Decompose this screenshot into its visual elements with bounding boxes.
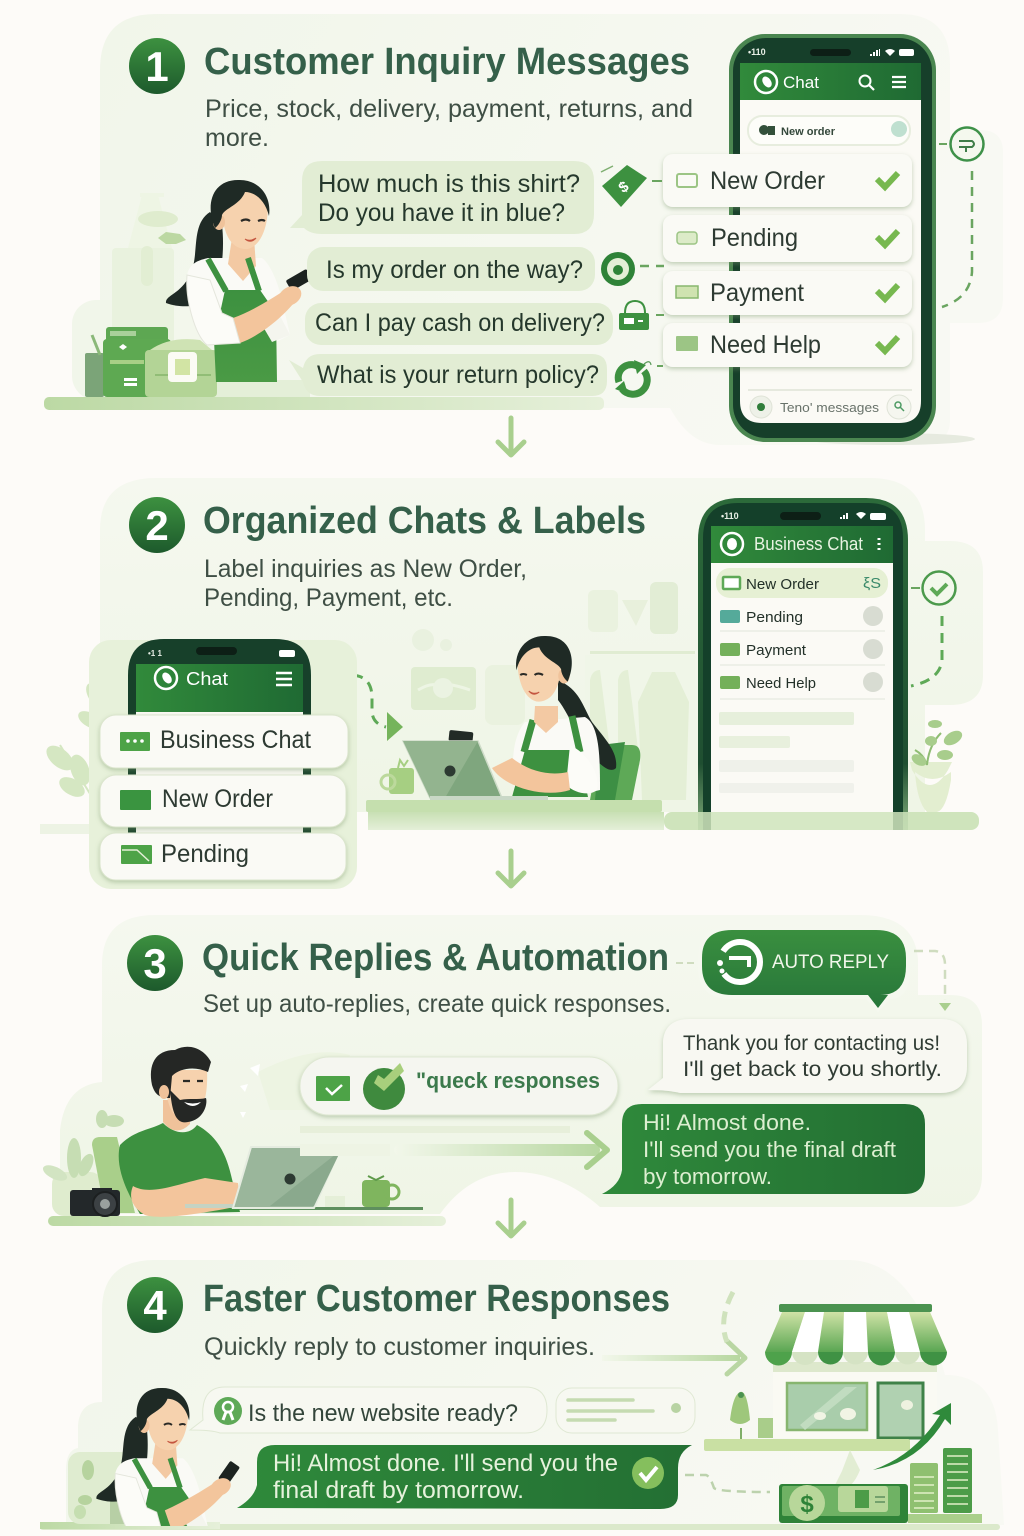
illustration: cash, bars and growth arrow bbox=[685, 1403, 982, 1523]
group: small phone with label cards: •1 1 bbox=[148, 649, 162, 658]
arrow: step 2 to 3 bbox=[498, 851, 524, 886]
label card: new order bbox=[663, 154, 912, 207]
text block: step 2 description: Pending, Payment, etc. bbox=[204, 584, 453, 612]
icon: return arrows bbox=[615, 360, 663, 394]
phone: chat app bbox=[729, 34, 975, 445]
badge: number 3: 3 bbox=[143, 940, 167, 987]
phone: chat app: •110 bbox=[748, 47, 766, 57]
chat bubble: website question bbox=[190, 1387, 547, 1433]
chat bubble: thank you bbox=[648, 1019, 967, 1093]
illustration: mug bbox=[381, 760, 414, 794]
chat bubble: order status question: Is my order on the way? bbox=[326, 256, 583, 284]
icon: check badge with dashed connector bbox=[911, 572, 956, 686]
label card: need help bbox=[663, 323, 912, 367]
text block: step 4 description: Quickly reply to customer inquiries. bbox=[204, 1333, 595, 1361]
chat bubble: website question: Is the new website ready? bbox=[248, 1400, 518, 1427]
arrow: dashed auto reply to message bbox=[914, 951, 951, 1011]
panel: step 1 customer inquiry messages bbox=[44, 14, 1003, 445]
arrow: to reply bubble bbox=[300, 1126, 607, 1167]
chat bubble: almost done bbox=[602, 1104, 925, 1194]
illustration: storefront bbox=[704, 1304, 947, 1451]
text block: step 1 description: Price, stock, delivery, payment, returns, and bbox=[205, 95, 693, 123]
heading: step 3: Quick Replies & Automation bbox=[202, 937, 669, 979]
chat bubble: price question: Do you have it in blue? bbox=[318, 199, 565, 227]
text block: step 3 description: Set up auto-replies, create quick responses. bbox=[203, 990, 671, 1018]
phone: business chat list: •110 bbox=[721, 511, 739, 521]
illustration: desk bbox=[366, 800, 979, 830]
text block: step 2 description: Label inquiries as New Order, bbox=[204, 555, 527, 583]
heading: step 2: Organized Chats & Labels bbox=[203, 500, 646, 542]
chat bubble: almost done: Hi! Almost done. bbox=[643, 1110, 811, 1135]
illustration: woman with phone bbox=[96, 1388, 240, 1536]
illustration: decorative leaves left bbox=[42, 680, 108, 810]
text block: step 1 description: more. bbox=[205, 124, 269, 152]
arrow: to storefront bbox=[602, 1292, 745, 1374]
icon: delivery location ring bbox=[601, 252, 664, 286]
phone: business chat list: Payment bbox=[746, 642, 807, 659]
illustration: woman at laptop bbox=[492, 636, 640, 800]
icon: plant bbox=[910, 720, 965, 812]
pill: quick responses bbox=[300, 1057, 618, 1115]
group: small phone with label cards: Chat bbox=[186, 669, 228, 689]
icon: camera bbox=[70, 1188, 120, 1216]
badge: number 1 bbox=[129, 38, 185, 94]
card: business chat: Business Chat bbox=[160, 726, 311, 754]
icon: cash payment lock bbox=[619, 301, 664, 330]
heading: step 4: Faster Customer Responses bbox=[203, 1278, 670, 1320]
chat bubble: almost done: I'll send you the final draft bbox=[643, 1137, 896, 1162]
phone: chat app: Chat bbox=[783, 73, 819, 92]
badge: number 2: 2 bbox=[145, 502, 169, 549]
pill: quick responses: "queck responses bbox=[416, 1068, 600, 1093]
phone: business chat list: ξS bbox=[863, 575, 881, 592]
label card: pending bbox=[663, 215, 912, 262]
label card: pending: Pending bbox=[711, 224, 798, 252]
phone: business chat list: Business Chat bbox=[754, 534, 863, 554]
card: new order bbox=[100, 775, 346, 827]
phone: chat app: Teno' messages bbox=[780, 400, 880, 415]
label card: need help: Need Help bbox=[710, 331, 821, 359]
button: auto reply: AUTO REPLY bbox=[772, 952, 889, 973]
label card: payment bbox=[663, 271, 912, 315]
chat bubble: return question: What is your return policy? bbox=[317, 361, 599, 389]
arrow: dashed from chat to woman bbox=[319, 675, 403, 741]
panel: step 2 organized chats and labels bbox=[40, 478, 983, 889]
button: auto reply bbox=[676, 926, 910, 1012]
label card: payment: Payment bbox=[710, 279, 804, 307]
phone: business chat list: New Order bbox=[746, 576, 819, 593]
illustration: counter and boxes bbox=[44, 327, 604, 410]
chat bubble: payment question: Can I pay cash on delivery? bbox=[315, 309, 605, 337]
illustration: floor and plants bbox=[40, 1452, 1000, 1530]
chat bubble: almost done reply: final draft by tomorrow. bbox=[273, 1477, 524, 1504]
icon: price tag bbox=[601, 165, 662, 207]
chat bubble: order status question bbox=[307, 247, 595, 291]
chat bubble: return question bbox=[289, 354, 607, 396]
arrow: step 1 to 2 bbox=[498, 418, 524, 455]
badge: number 2 bbox=[129, 497, 185, 553]
badge: number 4: 4 bbox=[143, 1282, 167, 1329]
phone: business chat list bbox=[698, 498, 908, 830]
panel: step 3 quick replies and automation bbox=[41, 915, 982, 1226]
chat bubble: payment question bbox=[305, 303, 613, 345]
card: new order: New Order bbox=[162, 785, 273, 813]
icon: reply badge with dashed connector bbox=[939, 128, 984, 307]
chat bubble: thank you: I'll get back to you shortly. bbox=[683, 1058, 942, 1081]
chat bubble: almost done reply bbox=[237, 1445, 692, 1509]
illustration: woman with phone bbox=[166, 180, 312, 382]
chat bubble: thank you: Thank you for contacting us! bbox=[683, 1032, 940, 1055]
card: pending: Pending bbox=[161, 840, 249, 868]
card: pending bbox=[100, 833, 346, 880]
illustration: cash, bars and growth arrow: $ bbox=[800, 1491, 814, 1518]
placeholder message card bbox=[556, 1388, 695, 1433]
phone: business chat list: Pending bbox=[746, 609, 803, 626]
icon: mug bbox=[325, 1176, 399, 1207]
icon: price tag: $ bbox=[615, 178, 633, 197]
chat bubble: price question bbox=[290, 161, 594, 234]
card: business chat bbox=[100, 715, 348, 768]
illustration: laptop bbox=[403, 730, 548, 800]
badge: number 4 bbox=[127, 1277, 183, 1333]
badge: number 3 bbox=[127, 935, 183, 991]
badge: number 1: 1 bbox=[145, 43, 169, 90]
phone: business chat list: Need Help bbox=[746, 675, 816, 692]
chat bubble: almost done reply: Hi! Almost done. I'll send you the bbox=[273, 1450, 618, 1477]
illustration: boutique background bbox=[411, 582, 695, 800]
chat bubble: almost done: by tomorrow. bbox=[643, 1164, 772, 1189]
illustration: leaves and soft blobs bbox=[41, 1052, 350, 1216]
chat bubble: price question: How much is this shirt? bbox=[318, 170, 580, 198]
heading: step 1: Customer Inquiry Messages bbox=[204, 41, 690, 83]
group: desk and man at laptop bbox=[48, 1047, 446, 1226]
phone: chat app: New order bbox=[781, 126, 836, 138]
label card: new order: New Order bbox=[710, 167, 825, 195]
panel: step 4 faster customer responses bbox=[40, 1260, 1004, 1536]
arrow: step 3 to 4 bbox=[498, 1200, 524, 1236]
group: small phone with label cards bbox=[89, 639, 357, 889]
